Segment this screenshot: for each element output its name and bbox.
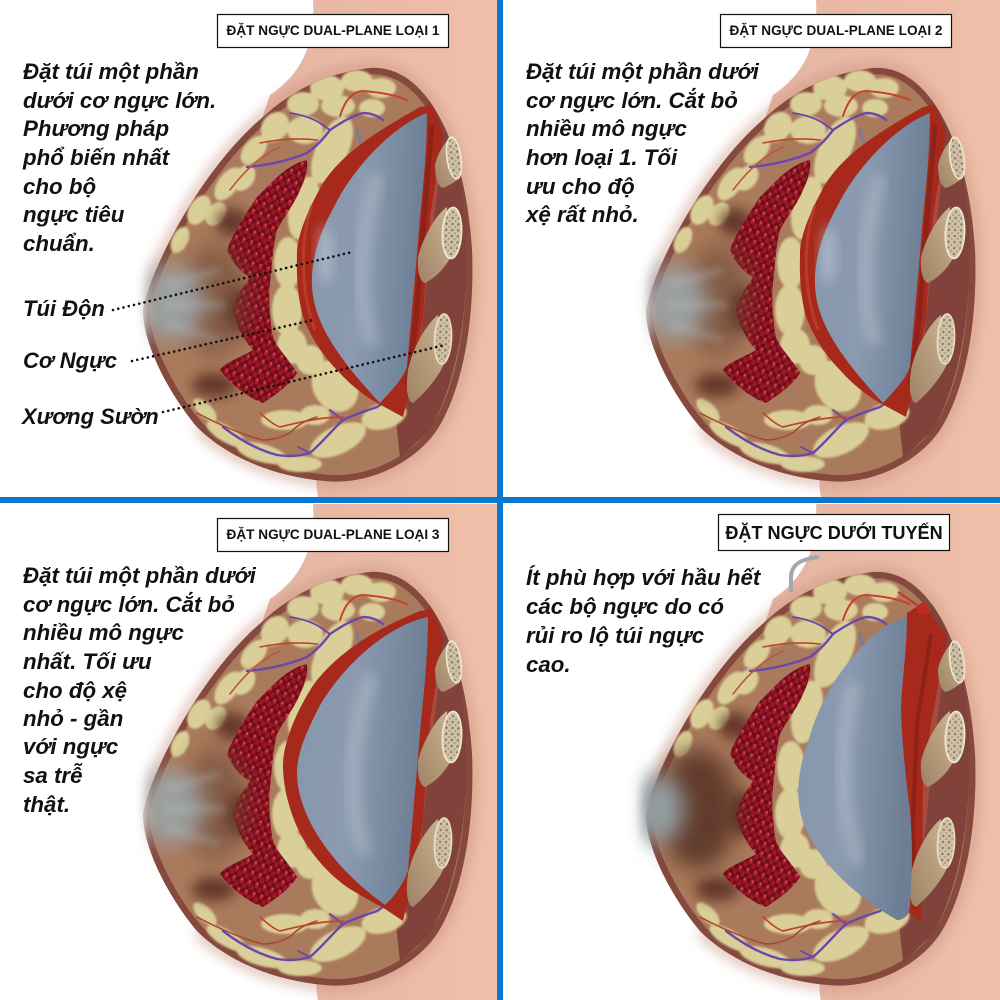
title box: type 1 bbox=[218, 14, 448, 48]
description text: type 3: nhất. Tối ưu bbox=[23, 649, 152, 674]
description text: type 3: thật. bbox=[23, 792, 70, 817]
description text: type 3: cơ ngực lớn. Cắt bỏ bbox=[23, 592, 235, 617]
description text: type 2: hơn loại 1. Tối bbox=[526, 145, 678, 170]
title box: type 3 bbox=[218, 518, 448, 552]
description text: type 2: Đặt túi một phần dưới bbox=[526, 59, 760, 84]
metal hook bbox=[791, 557, 819, 592]
description text: type 1: Phương pháp bbox=[23, 116, 169, 141]
ribs 3 bbox=[407, 640, 464, 907]
description text: type 2: xệ rất nhỏ. bbox=[525, 202, 639, 227]
description text: subglandular: Ít phù hợp với hầu hết bbox=[526, 565, 762, 590]
callout: implant: Túi Độn bbox=[23, 296, 105, 321]
callout: pectoral muscle: Cơ Ngực bbox=[23, 348, 117, 373]
title box: type 1: ĐẶT NGỰC DUAL-PLANE LOẠI 1 bbox=[227, 23, 440, 38]
description text: type 1: Đặt túi một phần bbox=[23, 59, 199, 84]
description text: subglandular: rủi ro lộ túi ngực bbox=[526, 623, 705, 648]
implant 4 bbox=[798, 617, 912, 920]
callout: rib: Xương Sườn bbox=[20, 404, 159, 429]
description text: subglandular: các bộ ngực do có bbox=[526, 594, 724, 619]
description text: type 3: nhỏ - gần bbox=[23, 706, 123, 731]
pectoral muscle 3 bbox=[283, 609, 443, 921]
nipple area blur 2 bbox=[636, 240, 760, 360]
breast cross-section illustration 3 bbox=[143, 504, 497, 1000]
implant 3 bbox=[297, 617, 428, 905]
panel: dual-plane type 2 bbox=[607, 0, 1000, 497]
title box: type 3: ĐẶT NGỰC DUAL-PLANE LOẠI 3 bbox=[227, 527, 440, 542]
nipple area blur 3 bbox=[134, 744, 257, 864]
description text: type 3: Đặt túi một phần dưới bbox=[23, 563, 257, 588]
callout: implant bbox=[23, 252, 352, 321]
description text: type 3: cho độ xệ bbox=[23, 678, 127, 703]
title box: subglandular bbox=[718, 514, 950, 550]
description text: type 2: cơ ngực lớn. Cắt bỏ bbox=[526, 88, 738, 113]
nipple area blur 4 bbox=[603, 749, 738, 869]
nipple area blur 1 bbox=[134, 240, 257, 360]
pectoral muscle 4 bbox=[897, 592, 947, 923]
description text: type 1: chuẩn. bbox=[23, 231, 95, 256]
ribs 2 bbox=[910, 136, 967, 403]
description text: type 1: ngực tiêu bbox=[23, 202, 125, 227]
ribs 1 bbox=[407, 136, 464, 403]
description text: type 3: nhiều mô ngực bbox=[23, 620, 184, 645]
breast cross-section illustration 4 bbox=[646, 504, 1000, 1000]
breast cross-section illustration 2 bbox=[646, 0, 1000, 497]
description text: type 1: phổ biến nhất bbox=[22, 145, 171, 170]
panel: subglandular placement bbox=[603, 504, 1000, 1000]
description text: type 3: với ngực bbox=[23, 734, 119, 759]
panel: dual-plane type 1 bbox=[104, 0, 497, 497]
description text: type 2: ưu cho độ bbox=[526, 174, 635, 199]
pectoral muscle 2 bbox=[800, 105, 946, 417]
pectoral muscle 1 bbox=[297, 105, 443, 417]
implant 1 bbox=[312, 113, 427, 403]
title box: type 2 bbox=[720, 14, 952, 48]
description text: subglandular: cao. bbox=[526, 652, 571, 677]
callout: pectoral muscle bbox=[23, 320, 313, 373]
title box: subglandular: ĐẶT NGỰC DƯỚI TUYẾN bbox=[725, 522, 943, 543]
description text: type 1: cho bộ bbox=[23, 174, 96, 199]
callout: rib bbox=[20, 345, 445, 429]
ribs 4 bbox=[910, 640, 967, 907]
description text: type 2: nhiều mô ngực bbox=[526, 116, 687, 141]
title box: type 2: ĐẶT NGỰC DUAL-PLANE LOẠI 2 bbox=[730, 23, 943, 38]
panel: dual-plane type 3 bbox=[104, 504, 497, 1000]
description text: type 3: sa trễ bbox=[23, 763, 83, 788]
breast cross-section illustration 1 bbox=[143, 0, 497, 497]
implant 2 bbox=[815, 113, 930, 403]
description text: type 1: dưới cơ ngực lớn. bbox=[23, 88, 216, 113]
